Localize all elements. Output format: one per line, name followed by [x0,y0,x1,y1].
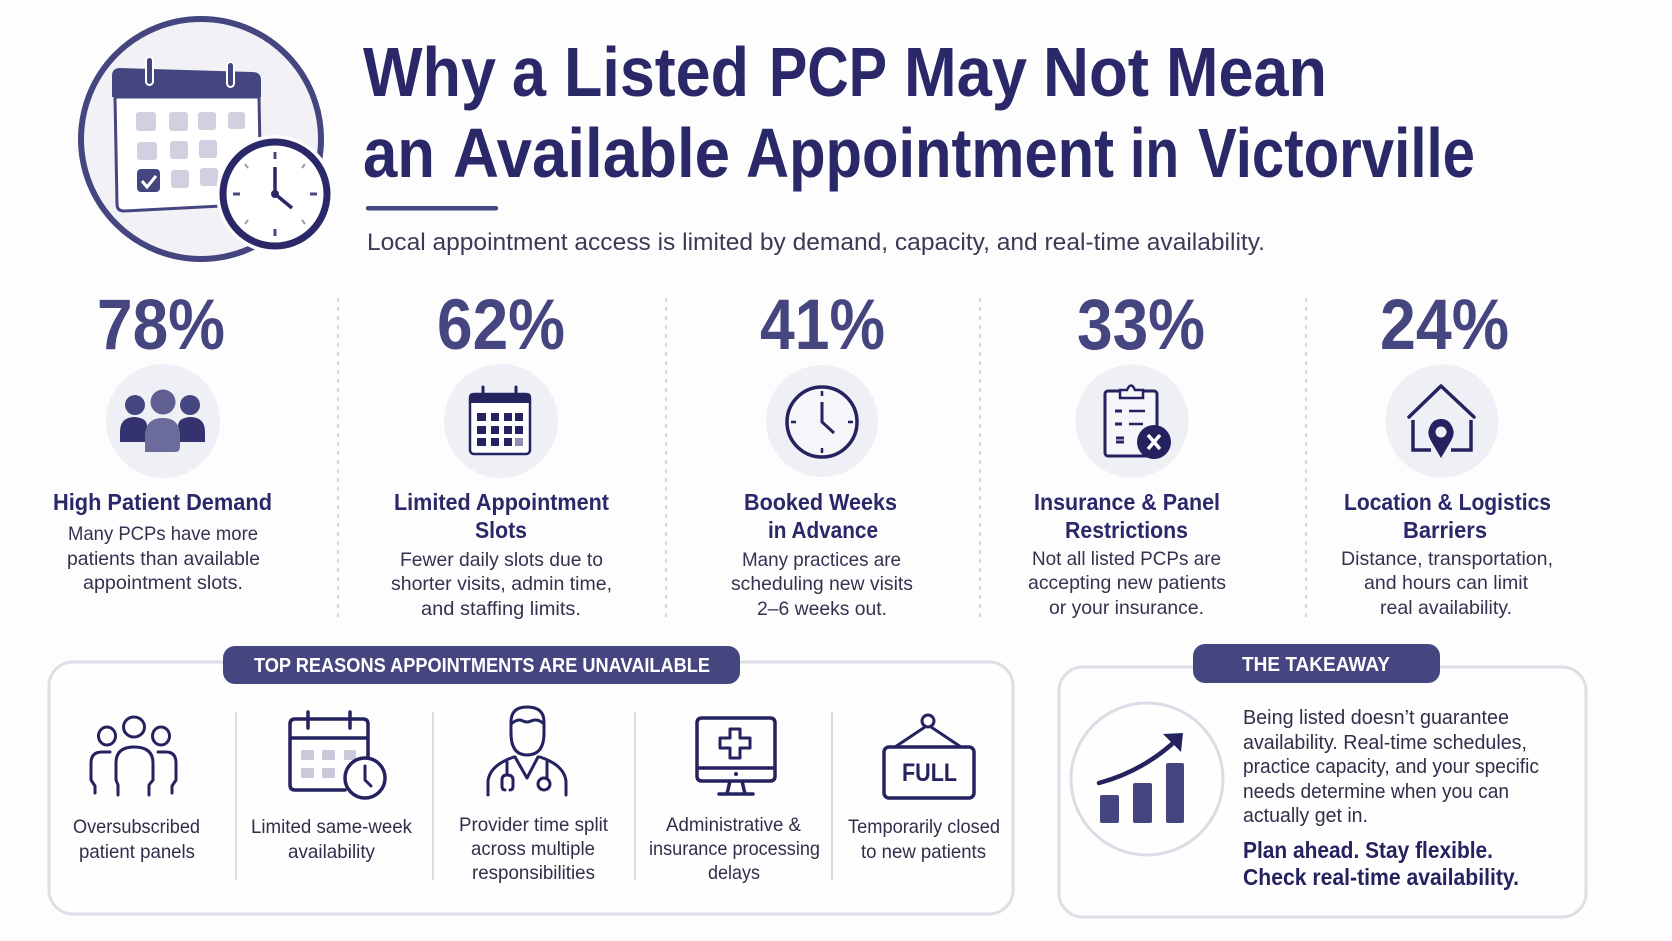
reason label: oversubscribed [73,816,200,863]
description: and hours can limit [1364,572,1529,594]
takeaway text: actually get in. [1243,805,1368,827]
description: patients than available [67,548,260,570]
reason label: administrative [649,814,820,884]
icon: clock [766,365,878,477]
reason label: same-week [251,816,412,863]
icon: calendar and clock emblem [81,19,334,259]
reason label: oversubscribed: patient panels [79,841,195,863]
title [363,33,1475,192]
description: Not all listed PCPs are [1032,548,1221,570]
call to action [1243,837,1519,890]
panel: stat booked weeks in advance [731,286,913,620]
title: May [904,33,1027,111]
heading: Slots [475,517,527,543]
heading pill: top reasons [223,646,740,684]
title: Available [453,114,730,192]
heading: in Advance [768,517,878,543]
description [731,549,913,620]
title: in [1130,114,1179,192]
reason label: administrative: delays [708,862,760,884]
heading: Booked Weeks [744,489,897,515]
heading [1344,489,1551,543]
icon: calendar [444,364,558,478]
reason label: provider time: across multiple [471,838,595,860]
title: Not [1043,33,1149,111]
description [391,549,612,620]
takeaway text: practice capacity, and your specific [1243,756,1539,778]
stat 41%: 41% [760,286,885,365]
heading: High Patient Demand [53,489,272,515]
heading pill: the takeaway: THE TAKEAWAY [1242,654,1391,676]
description: Fewer daily slots due to [400,549,603,571]
heading: Limited Appointment [394,489,609,515]
call to action: Plan ahead. Stay flexible. [1243,837,1493,863]
reason label: temporarily closed: to new patients [861,841,986,863]
stat 78%: 78% [97,286,225,365]
reason label: provider time: responsibilities [472,862,595,884]
stat 33%: 33% [1077,286,1205,365]
reason label: oversubscribed: Oversubscribed [73,816,200,838]
reason label: provider time: Provider time split [459,814,609,836]
heading pill: the takeaway [1193,644,1440,683]
panel: stat limited appointment slots [391,286,612,620]
stat 62%: 62% [437,286,565,365]
description [1028,548,1226,619]
title: PCP [769,33,887,111]
panel: stat high patient demand [53,286,272,594]
heading [394,489,609,543]
reason label: same-week: availability [288,841,375,863]
icon: people group [106,364,220,478]
takeaway text: availability. Real-time schedules, [1243,732,1527,754]
description: Many PCPs have more [68,523,258,545]
reason label: same-week: Limited same-week [251,816,412,838]
takeaway text: Being listed doesn’t guarantee [1243,707,1509,729]
description: and staffing limits. [421,598,581,620]
description [1341,548,1553,619]
panel: the takeaway [1059,644,1586,917]
title: Appointment [746,114,1114,192]
icon: clipboard with x [1076,364,1188,478]
icon: house with pin [1386,364,1498,478]
reason label: administrative: Administrative & [666,814,801,836]
reason label: provider time [459,814,609,884]
description: Many practices are [742,549,901,571]
title: Listed [564,33,749,111]
panel: top reasons [49,646,1013,914]
title: a [512,33,547,111]
description: accepting new patients [1028,572,1226,594]
icon: doctor [488,707,566,795]
heading [744,489,897,543]
heading pill: top reasons: TOP REASONS APPOINTMENTS ARE UNAVAILABLE [254,655,710,677]
description: real availability. [1380,597,1512,619]
title underline [366,206,498,210]
description: Distance, transportation, [1341,548,1553,570]
icon: monitor with cross [697,718,775,794]
icon: full sign: FULL [902,759,957,787]
title: Why [363,33,496,111]
takeaway text [1243,707,1539,827]
description: shorter visits, admin time, [391,573,612,595]
description: or your insurance. [1049,597,1204,619]
panel: stat location and logistics barriers [1341,286,1553,619]
description: appointment slots. [83,572,243,594]
call to action: Check real-time availability. [1243,864,1519,890]
heading: Location & Logistics [1344,489,1551,515]
description [67,523,260,594]
heading: Restrictions [1065,517,1188,543]
takeaway text: needs determine when you can [1243,781,1509,803]
reason label: administrative: insurance processing [649,838,820,860]
title: an [363,114,435,192]
icon: calendar with clock [290,712,385,798]
description: scheduling new visits [731,573,913,595]
description: 2–6 weeks out. [757,598,887,620]
title: Victorville [1198,114,1475,192]
panel: stat insurance and panel restrictions [1028,286,1226,619]
heading: Insurance & Panel [1034,489,1220,515]
subtitle: Local appointment access is limited by demand, capacity, and real-time availability. [367,229,1265,256]
stat 24%: 24% [1380,286,1509,365]
icon: rising bar chart [1071,703,1223,855]
heading [1034,489,1220,543]
icon: full sign [884,715,974,798]
title: Mean [1166,33,1327,111]
reason label: temporarily closed [848,816,1000,863]
reason label: temporarily closed: Temporarily closed [848,816,1000,838]
heading: Barriers [1403,517,1487,543]
icon: people outline [91,717,176,795]
